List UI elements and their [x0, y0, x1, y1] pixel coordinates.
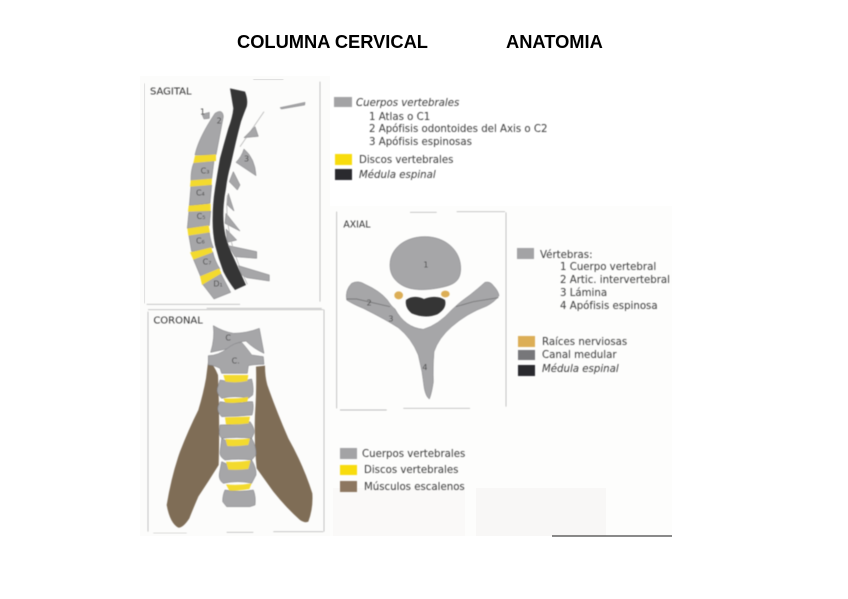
text: vertebrae list	[540, 249, 670, 312]
vertebra labels: C	[225, 333, 231, 342]
scanned figures and legends	[144, 79, 670, 533]
heading: coronal: CORONAL	[153, 316, 203, 327]
title	[237, 31, 603, 52]
text: vertebrae list: Vértebras:	[540, 249, 593, 261]
legend: sagital	[334, 97, 547, 181]
panel: sagital	[144, 79, 322, 308]
text: vertebral bodies list: 1 Atlas o C1	[369, 112, 430, 123]
text: nerve roots: Raíces nerviosas	[542, 336, 627, 348]
joint lines	[347, 298, 498, 307]
text: muscles: Músculos escalenos	[364, 481, 465, 493]
text: vertebral bodies list: 3 Apófisis espinosas	[369, 136, 472, 148]
heading: sagital: SAGITAL	[150, 86, 192, 97]
panel: axial	[337, 212, 506, 410]
swatch: muscles	[340, 481, 357, 492]
panel: coronal	[148, 310, 324, 533]
vertebra labels: 1	[200, 107, 205, 116]
text: canal: Canal medular	[542, 350, 617, 361]
axial labels: 2	[367, 299, 372, 308]
vertebral bodies	[208, 326, 264, 507]
vertebral body	[390, 237, 461, 290]
axial labels: 1	[423, 261, 428, 270]
vertebra labels: C.	[232, 357, 240, 366]
axial labels	[367, 261, 428, 372]
vertebra labels: C₇	[203, 257, 211, 266]
legend: coronal	[340, 448, 465, 493]
vertebra labels: 3	[244, 155, 249, 164]
spinal cord	[406, 297, 445, 316]
swatch: discs	[340, 465, 357, 475]
nerve roots	[394, 291, 450, 299]
vertebral bodies	[187, 111, 231, 299]
swatch: canal	[518, 350, 535, 360]
vertebral discs	[223, 375, 252, 491]
text: vertebrae list: 1 Cuerpo vertebral	[560, 262, 656, 273]
axial labels: 4	[422, 363, 427, 372]
swatch: discs	[335, 154, 352, 165]
text: vertebrae list: 4 Apófisis espinosa	[560, 300, 658, 312]
swatch: spinal cord	[518, 365, 535, 376]
swatch: vertebral bodies	[340, 448, 357, 459]
text: vertebral bodies list	[356, 98, 547, 148]
title: COLUMNA CERVICAL	[237, 31, 428, 52]
vertebra labels	[225, 333, 240, 366]
swatch: spinal cord	[335, 169, 352, 180]
spinal cord	[213, 88, 247, 290]
swatch: vertebrae	[517, 248, 534, 259]
title: ANATOMIA	[506, 31, 603, 52]
spinous processes	[225, 102, 305, 284]
axial labels: 3	[388, 315, 393, 324]
scalene muscles	[167, 360, 312, 528]
vertebra labels: C₃	[201, 167, 209, 176]
text: vertebral bodies list: Cuerpos vertebrales	[356, 98, 460, 109]
vertebral discs	[187, 154, 221, 285]
swatch: nerve roots	[518, 336, 535, 347]
heading: axial: AXIAL	[343, 220, 371, 231]
text: discs: Discos vertebrales	[364, 465, 458, 476]
scanned page background	[140, 76, 672, 536]
text: discs: Discos vertebrales	[359, 155, 453, 166]
vertebra labels: C₄	[196, 189, 205, 198]
vertebra labels	[196, 107, 249, 289]
text: vertebrae list: 3 Lámina	[560, 287, 607, 299]
vertebra labels: C₅	[197, 212, 205, 221]
vertebra labels: D₁	[213, 280, 223, 289]
vertebra labels: 2	[217, 116, 222, 125]
text: vertebral bodies: Cuerpos vertebrales	[362, 449, 465, 460]
text: spinal cord: Médula espinal	[359, 169, 436, 181]
text: spinal cord: Médula espinal	[542, 363, 619, 375]
vertebral arch	[346, 282, 499, 399]
text: vertebral bodies list: 2 Apófisis odontoides del Axis o C2	[369, 123, 547, 135]
vertebra labels: C₆	[196, 236, 205, 245]
text: vertebrae list: 2 Artic. intervertebral	[560, 275, 670, 286]
legend: axial	[517, 248, 670, 376]
swatch: vertebral bodies	[334, 97, 352, 107]
